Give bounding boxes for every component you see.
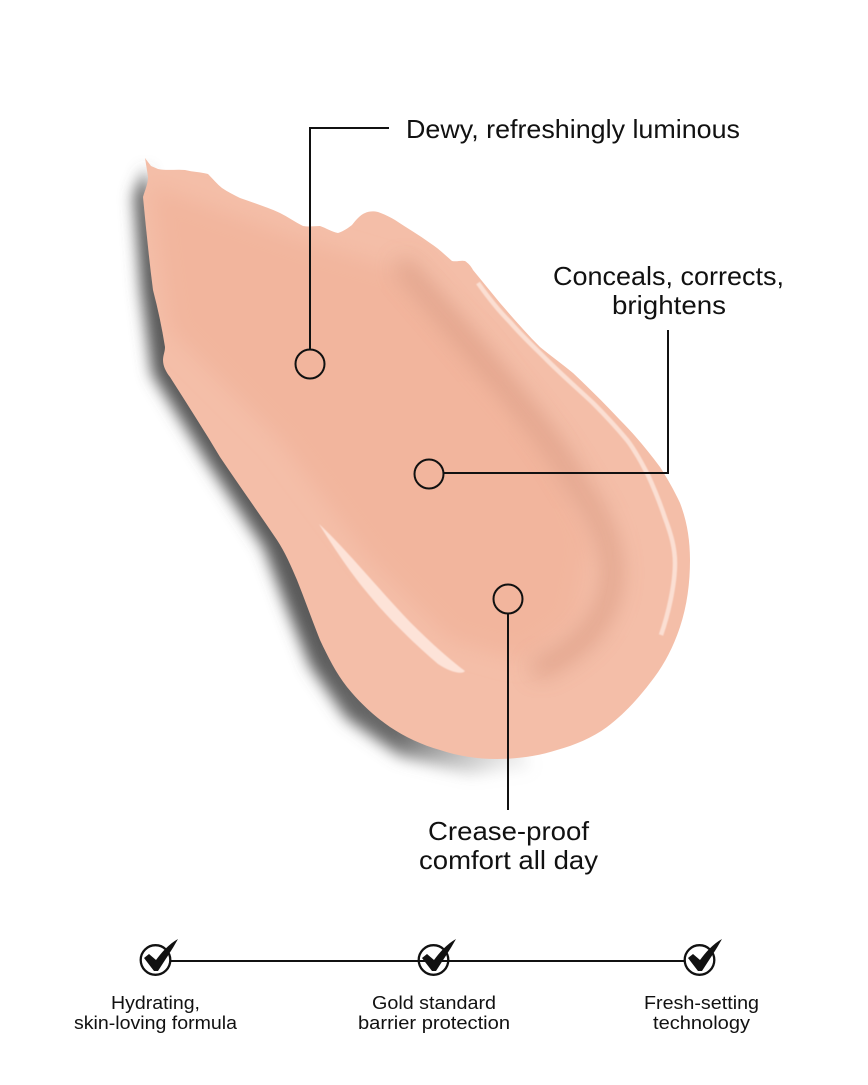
- benefit: fresh-setting technology: Fresh-setting: [644, 992, 759, 1013]
- highlight: lower left: [319, 524, 465, 673]
- benefit: fresh-setting technology: technology: [653, 1012, 751, 1033]
- benefit: barrier protection: Gold standard: [372, 992, 496, 1013]
- benefits timeline: [74, 939, 759, 1033]
- callout: conceals, corrects, brightens: [414, 261, 784, 488]
- benefit: fresh-setting technology: [644, 939, 759, 1033]
- highlight: right edge: [478, 283, 675, 635]
- benefit: hydrating formula: Hydrating,: [111, 992, 200, 1013]
- callout: conceals, corrects, brightens: Conceals, corrects,: [553, 261, 784, 291]
- swatch shadow: [134, 168, 530, 774]
- main flat area: [162, 202, 580, 649]
- concealer swatch: [143, 158, 690, 759]
- groove shadow: [405, 268, 612, 668]
- benefit: barrier protection: [358, 939, 510, 1033]
- callout: conceals, corrects, brightens: brightens: [612, 290, 726, 320]
- callout: crease-proof comfort all day: Crease-proof: [428, 816, 590, 846]
- benefit: hydrating formula: [74, 939, 238, 1033]
- callout: crease-proof comfort all day: comfort all day: [419, 845, 598, 875]
- callout: dewy, refreshingly luminous: Dewy, refreshingly luminous: [406, 114, 740, 144]
- benefit: hydrating formula: skin-loving formula: [74, 1012, 238, 1033]
- callout: crease-proof comfort all day: [419, 584, 598, 875]
- benefit: barrier protection: barrier protection: [358, 1012, 510, 1033]
- callout: dewy, refreshingly luminous: [296, 114, 740, 378]
